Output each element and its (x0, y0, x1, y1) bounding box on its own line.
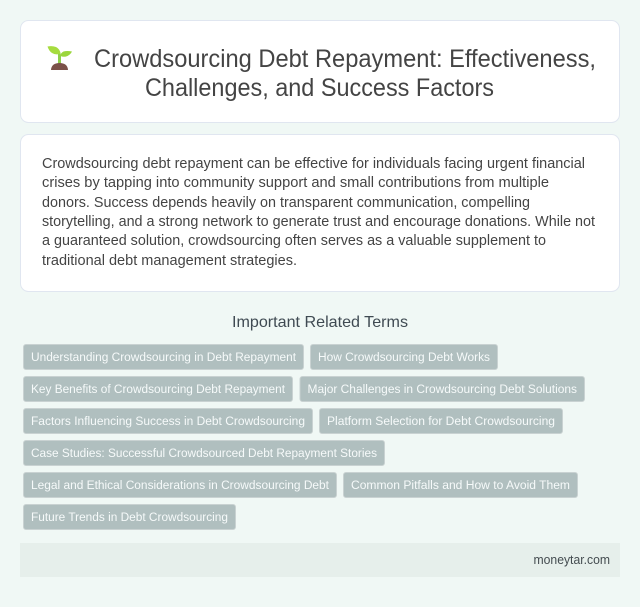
tag (24, 472, 336, 498)
text block: summary: Crowdsourcing debt repayment can be effective for individuals facing urgent financial (42, 156, 585, 172)
heading: important related terms: Important Related Terms (232, 314, 408, 331)
text block: summary: storytelling, and a strong network to generate trust and encourage donations. While not (42, 214, 595, 230)
tag: Platform Selection for Debt Crowdsourcing (327, 414, 555, 428)
tag (24, 408, 312, 434)
tag: Future Trends in Debt Crowdsourcing (31, 510, 228, 524)
tag: Factors Influencing Success in Debt Crowdsourcing (31, 414, 305, 428)
tag list (24, 344, 584, 530)
tag (344, 472, 578, 498)
tag: Common Pitfalls and How to Avoid Them (351, 478, 570, 492)
text block: summary: crises by tapping into community support and small contributions from multiple (42, 175, 549, 191)
footer (20, 543, 620, 577)
tag (300, 376, 584, 402)
tag (24, 440, 384, 466)
panel: summary card (20, 134, 620, 292)
footer: moneytar.com (534, 553, 610, 567)
tag: How Crowdsourcing Debt Works (318, 350, 490, 364)
title: Crowdsourcing Debt Repayment: Effectiveness, (94, 45, 596, 73)
panel: title card (20, 20, 620, 122)
tag: Major Challenges in Crowdsourcing Debt Solutions (308, 382, 577, 396)
text block: summary: donors. Success depends heavily on transparent communication, compelling (42, 195, 530, 211)
text block: summary (42, 156, 595, 269)
title (94, 45, 596, 102)
tag: Key Benefits of Crowdsourcing Debt Repayment (31, 382, 286, 396)
text block: summary: a guaranteed solution, crowdsourcing often serves as a valuable supplement to (42, 233, 546, 249)
tag: Understanding Crowdsourcing in Debt Repayment (31, 350, 297, 364)
tag: Case Studies: Successful Crowdsourced Debt Repayment Stories (31, 446, 377, 460)
tag (24, 344, 304, 370)
icon: seedling (48, 46, 72, 70)
tag (24, 376, 292, 402)
title: Challenges, and Success Factors (145, 74, 494, 102)
text block: summary: traditional debt management strategies. (42, 253, 297, 269)
tag (24, 504, 236, 530)
tag (320, 408, 562, 434)
tag: Legal and Ethical Considerations in Crowdsourcing Debt (31, 478, 330, 492)
tag (310, 344, 498, 370)
